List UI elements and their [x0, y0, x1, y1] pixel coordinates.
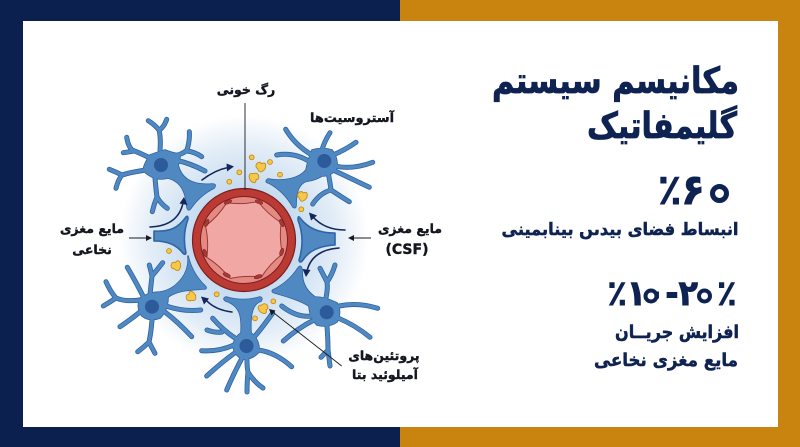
leader arrow: amyloid beta	[269, 309, 342, 366]
stat label: perivascular space expansion: انبساط فضای بیدںں بینابمینی	[502, 220, 738, 240]
leader line: blood vessel	[244, 103, 246, 190]
stat label: CSF flow increase	[594, 322, 739, 371]
astrocyte: bottom left	[103, 256, 206, 353]
astrocyte: top right	[266, 129, 373, 208]
glow around vessel	[119, 115, 369, 365]
stat: 10-20 percent: ٪۱۰-۲۰٪	[608, 274, 736, 314]
label: CSF right: (CSF)	[386, 242, 428, 258]
CSF flow arrows	[150, 164, 345, 312]
label: amyloid beta proteins	[348, 348, 420, 382]
lumen	[206, 202, 282, 278]
label: blood vessel: رگ خونی	[217, 81, 275, 97]
leader arrow: left CSF	[129, 235, 152, 241]
vessel wall	[192, 188, 296, 292]
end foot: right	[298, 217, 335, 262]
title: مکانیسم سیستم	[492, 61, 739, 102]
label: amyloid beta proteins: پروتئین‌های	[348, 348, 420, 363]
label: amyloid beta proteins: آمیلوئید بتا	[352, 367, 419, 382]
stat: 60 percent: ٪۶۰	[658, 165, 728, 214]
leader arrow: right CSF	[348, 235, 371, 241]
title: گلیمفاتیک	[587, 105, 737, 147]
astrocyte: top left	[109, 119, 215, 212]
label: CSF left: مایع مغزی	[60, 221, 124, 236]
astrocyte diagram	[103, 119, 378, 392]
stat label: CSF flow increase: مایع مغزی نخاعی	[594, 350, 738, 371]
astrocyte: bottom right	[272, 265, 378, 366]
label: CSF left	[60, 221, 124, 257]
astrocyte: bottom	[202, 297, 292, 392]
label: CSF left: نخاعی	[72, 242, 112, 257]
background: orange half	[400, 0, 800, 447]
vessel inner ring	[200, 196, 288, 284]
title	[492, 61, 739, 147]
background: navy half	[0, 0, 400, 447]
blood vessel	[192, 188, 296, 292]
label: CSF right	[378, 221, 442, 258]
endothelial nuclei	[202, 199, 285, 280]
label: astrocytes: آستروسیت‌ها	[310, 110, 395, 125]
label: CSF right: مایع مغزی	[378, 221, 442, 236]
end foot: left	[154, 216, 188, 254]
amyloid beta proteins	[167, 155, 307, 321]
stat label: CSF flow increase: افزایش جریــان	[615, 322, 739, 343]
